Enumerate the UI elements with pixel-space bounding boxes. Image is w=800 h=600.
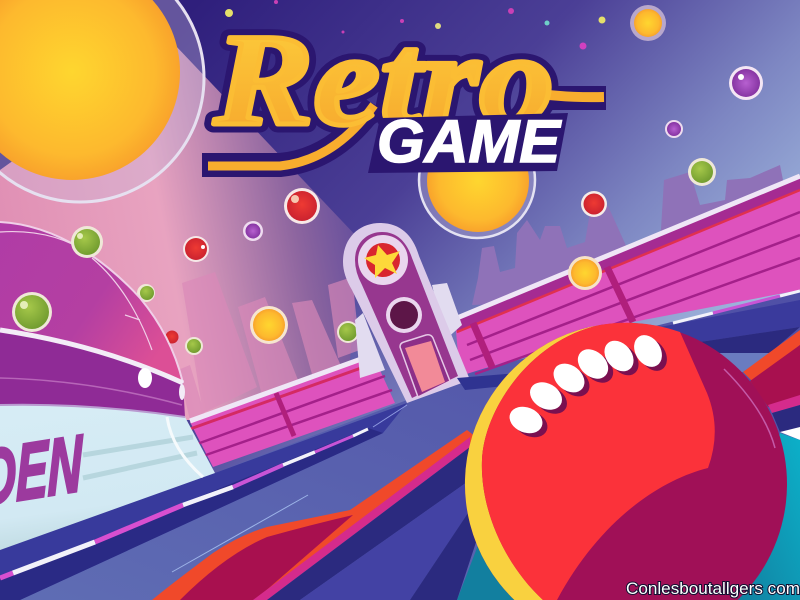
yellow bubble on fence (568, 256, 602, 290)
right side track (660, 291, 800, 600)
dome band (0, 328, 185, 417)
big red ball (465, 323, 787, 600)
GAME backing (368, 113, 568, 173)
bubbles (137, 5, 763, 355)
heading: GAME: GAME (377, 108, 562, 175)
dome (0, 222, 215, 550)
arcade tower (343, 223, 470, 403)
right fence (455, 176, 800, 376)
ball dimples (506, 330, 673, 442)
tower door (400, 335, 450, 397)
big sun top left (0, 0, 204, 202)
star lamp (358, 235, 408, 285)
skyline right (472, 165, 785, 305)
pink light cone (0, 45, 360, 420)
heading: Retro: Retro (213, 6, 554, 153)
dark lamp (386, 297, 422, 333)
swoosh fill (208, 92, 604, 166)
skyline left (178, 272, 360, 420)
left fence (190, 354, 395, 467)
road lane band (0, 372, 530, 600)
heading: Retro outline: Retro (213, 6, 554, 153)
swoosh underline (202, 98, 606, 165)
ball red panel (482, 323, 715, 600)
title logo (202, 6, 606, 175)
ball yellow rim (465, 325, 600, 600)
dome base (0, 405, 215, 550)
left green bubbles on dome (12, 226, 103, 332)
watermark text: Conlesboutallgers com (626, 579, 800, 598)
center sun (419, 122, 535, 238)
stars (225, 0, 606, 50)
lower track left (152, 430, 530, 600)
road surface (0, 290, 800, 600)
